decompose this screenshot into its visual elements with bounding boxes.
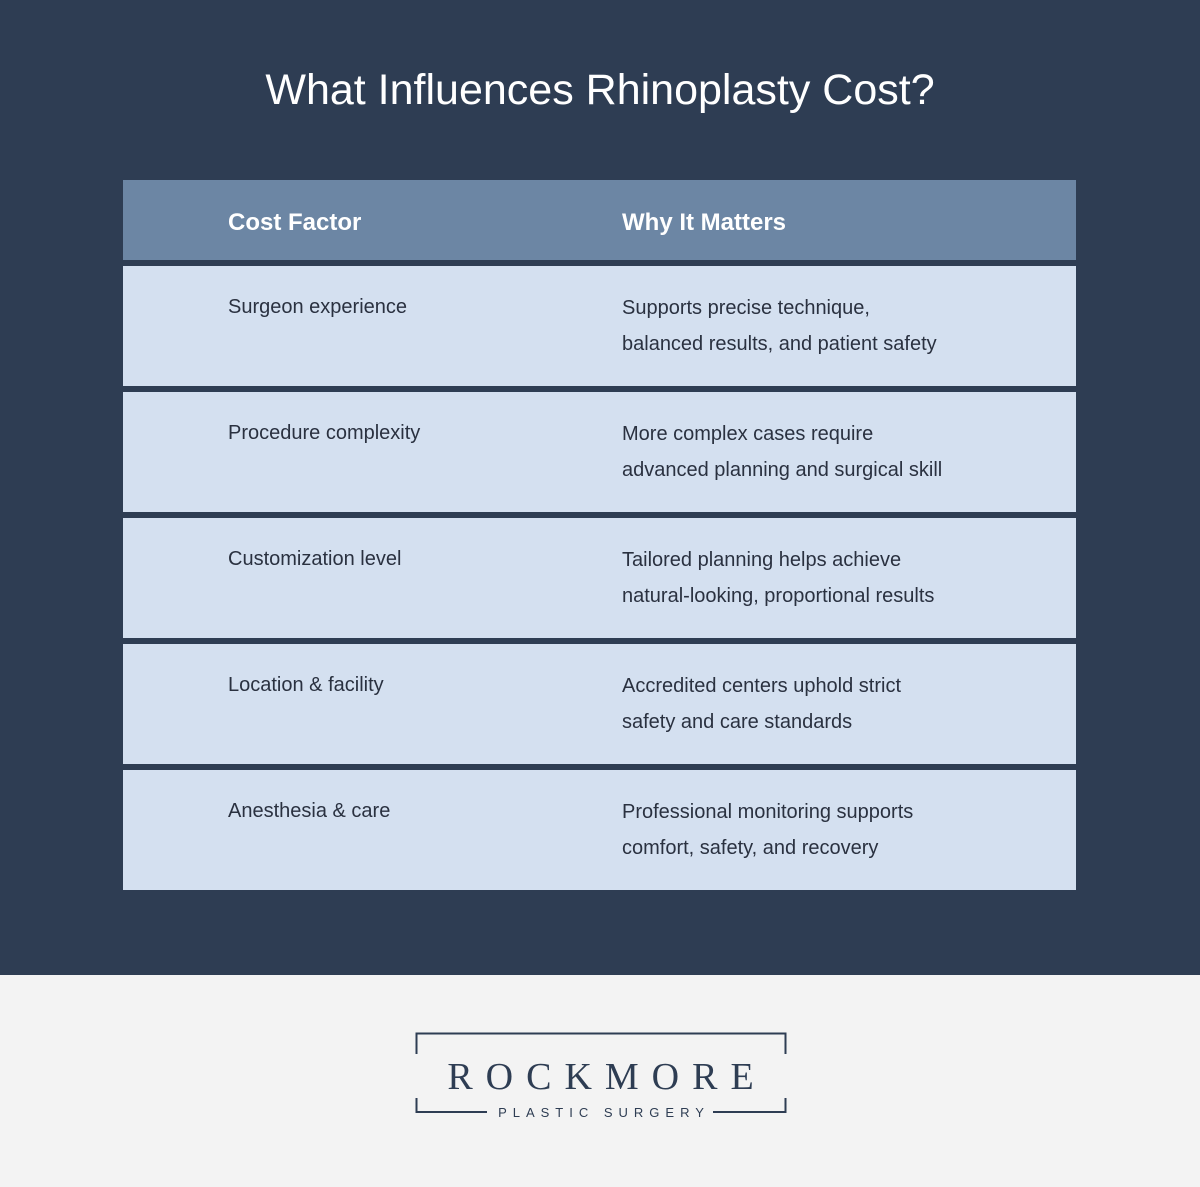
row: surgeon experience: Supports precise technique, — [622, 297, 870, 319]
table header: Cost Factor — [228, 209, 361, 236]
row: anesthesia & care: Professional monitoring supports — [622, 801, 913, 823]
row: surgeon experience: Surgeon experience — [228, 296, 407, 318]
row: anesthesia & care: comfort, safety, and recovery — [622, 837, 878, 859]
row: location & facility — [123, 644, 1076, 764]
row: customization level: Tailored planning helps achieve — [622, 549, 901, 571]
row: location & facility: Location & facility — [228, 674, 384, 696]
logo: PLASTIC SURGERY — [498, 1105, 710, 1120]
row: procedure complexity: More complex cases require — [622, 423, 873, 445]
row: customization level: natural-looking, proportional results — [622, 585, 934, 607]
row: customization level — [123, 518, 1076, 638]
row: procedure complexity: Procedure complexity — [228, 422, 420, 444]
table header: Why It Matters — [622, 209, 786, 236]
row: procedure complexity: advanced planning and surgical skill — [622, 459, 942, 481]
row: location & facility: Accredited centers uphold strict — [622, 675, 901, 697]
row: customization level: Customization level — [228, 548, 401, 570]
table header — [123, 180, 1076, 260]
row: anesthesia & care: Anesthesia & care — [228, 800, 390, 822]
logo — [416, 1032, 786, 1120]
logo: ROCKMORE — [447, 1056, 767, 1098]
row: surgeon experience — [123, 266, 1076, 386]
row: procedure complexity — [123, 392, 1076, 512]
title: What Influences Rhinoplasty Cost? — [265, 66, 935, 114]
row: surgeon experience: balanced results, and patient safety — [622, 333, 937, 355]
row: anesthesia & care — [123, 770, 1076, 890]
row: location & facility: safety and care standards — [622, 711, 852, 733]
